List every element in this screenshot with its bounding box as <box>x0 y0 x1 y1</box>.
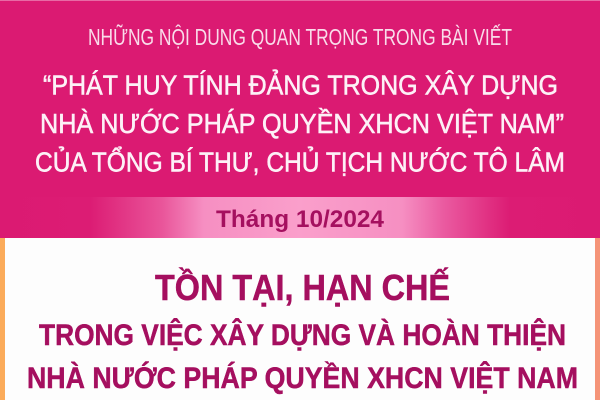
main heading <box>27 266 578 395</box>
panel: pink header <box>0 0 600 238</box>
date ribbon <box>0 197 600 238</box>
right salmon edge strip <box>595 238 600 400</box>
heading line 1: TỒN TẠI, HẠN CHẾ <box>155 266 450 308</box>
date label: Tháng 10/2024 <box>216 206 385 233</box>
left orange edge strip <box>0 238 5 400</box>
